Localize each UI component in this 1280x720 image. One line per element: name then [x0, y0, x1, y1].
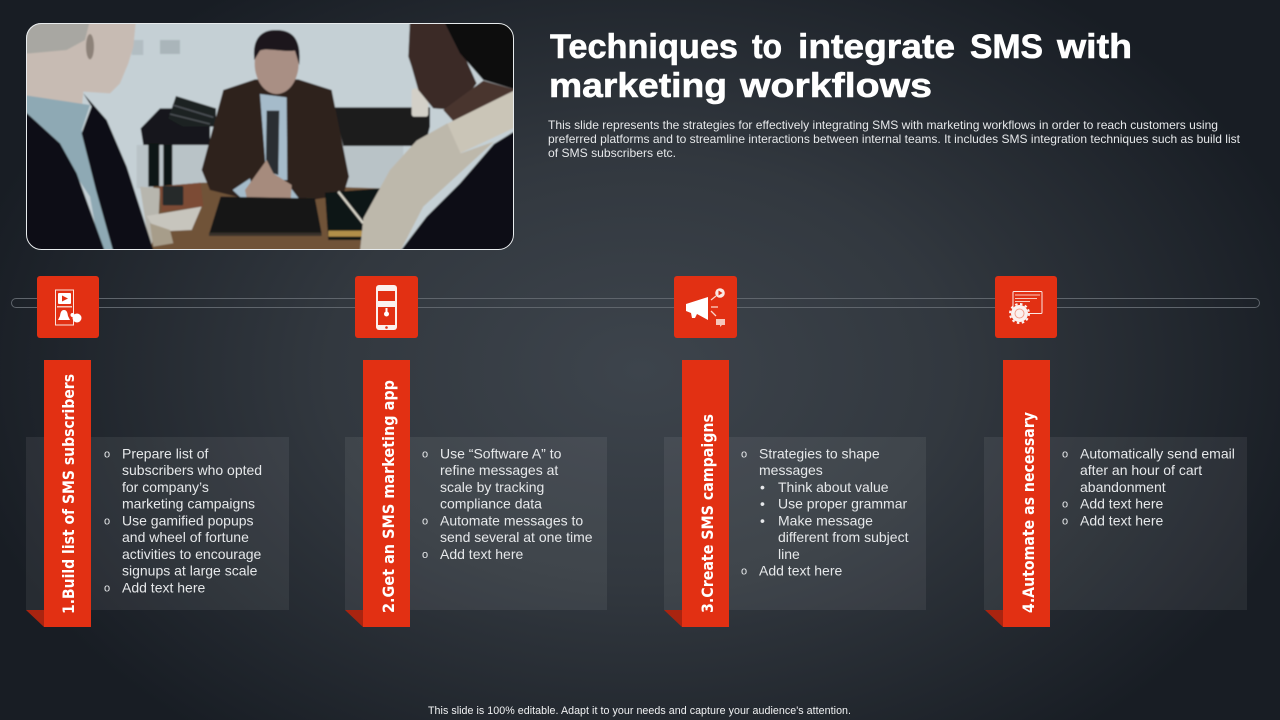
- title: Techniques: [550, 28, 738, 66]
- panel: step 4: after an hour of cart: [1080, 462, 1202, 478]
- panel: step 4: o: [1062, 448, 1068, 460]
- panel: step 3: Use proper grammar: [778, 496, 907, 512]
- panel: step 4: [984, 360, 1247, 627]
- panel: step 1: o: [104, 516, 110, 528]
- panel: step 2: compliance data: [440, 496, 542, 512]
- panel: step 1: subscribers who opted: [122, 462, 262, 478]
- icon: phone with video and bell: [37, 276, 99, 338]
- panel: step 2: [345, 360, 607, 627]
- icon: monitor and gear: [995, 276, 1057, 338]
- intro text block: [548, 118, 1241, 160]
- panel: step 2: o: [422, 448, 428, 460]
- panel: step 1: Add text here: [122, 580, 205, 596]
- panel: step 1: marketing campaigns: [122, 496, 255, 512]
- panel: step 1: 1.Build list of SMS subscribers: [59, 374, 78, 614]
- panel: step 1: and wheel of fortune: [122, 529, 249, 545]
- panel: step 4: 4.Automate as necessary: [1019, 411, 1038, 613]
- panel: step 2: scale by tracking: [440, 479, 544, 495]
- intro text block: of SMS subscribers etc.: [548, 146, 676, 160]
- panel: step 3: different from subject: [778, 529, 909, 545]
- panel: step 4: Add text here: [1080, 512, 1163, 528]
- footer note: This slide is 100% editable. Adapt it to your needs and capture your audience's attention.: [428, 705, 851, 717]
- panel: step 2: o: [422, 516, 428, 528]
- title: [549, 28, 1132, 105]
- icon: megaphone: [674, 276, 737, 338]
- panel: step 1: [26, 360, 289, 627]
- panel: step 4: o: [1062, 516, 1068, 528]
- panel: step 2: 2.Get an SMS marketing app: [379, 380, 398, 613]
- panel: step 3: Strategies to shape: [759, 446, 880, 462]
- panel: step 3: line: [778, 546, 800, 562]
- panel: step 3: •: [760, 496, 765, 512]
- panel: step 2: refine messages at: [440, 462, 558, 478]
- timeline track: [12, 298, 1260, 308]
- panel: step 3: o: [741, 448, 747, 460]
- panel: step 2: Automate messages to: [440, 512, 583, 528]
- panel: step 3: •: [760, 512, 765, 528]
- panel: step 1: o: [104, 582, 110, 594]
- panel: step 4: Automatically send email: [1080, 446, 1235, 462]
- icon: smartphone touch: [355, 276, 418, 338]
- panel: step 2: Use “Software A” to: [440, 446, 562, 462]
- panel: step 4: abandonment: [1080, 479, 1166, 495]
- panel: step 3: [664, 360, 926, 627]
- panel: step 1: signups at large scale: [122, 563, 258, 579]
- panel: step 2: send several at one time: [440, 529, 593, 545]
- title: SMS: [970, 28, 1043, 66]
- title: to: [752, 28, 782, 66]
- panel: step 1: Use gamified popups: [122, 512, 254, 528]
- panel: step 4: Add text here: [1080, 496, 1163, 512]
- title: workflows: [739, 67, 932, 105]
- panel: step 3: o: [741, 566, 747, 578]
- panel: step 4: o: [1062, 499, 1068, 511]
- panel: step 3: •: [760, 479, 765, 495]
- panel: step 3: Think about value: [778, 479, 889, 495]
- panel: step 2: Add text here: [440, 546, 523, 562]
- intro text block: preferred platforms and to streamline interactions between internal teams. It includes SMS integration techniques such as build list: [548, 132, 1241, 146]
- photo: three people in an office meeting: [20, 20, 520, 257]
- panel: step 3: Make message: [778, 512, 873, 528]
- panel: step 1: Prepare list of: [122, 446, 208, 462]
- title: marketing: [549, 67, 727, 105]
- panel: step 2: o: [422, 549, 428, 561]
- panel: step 3: 3.Create SMS campaigns: [698, 414, 717, 613]
- panel: step 3: messages: [759, 462, 823, 478]
- panel: step 1: for company’s: [122, 479, 209, 495]
- intro text block: This slide represents the strategies for effectively integrating SMS with marketing workflows in order to reach customers using: [548, 118, 1218, 132]
- panel: step 3: Add text here: [759, 563, 842, 579]
- panel: step 1: activities to encourage: [122, 546, 262, 562]
- panel: step 1: o: [104, 448, 110, 460]
- title: integrate: [798, 28, 955, 66]
- title: with: [1056, 28, 1132, 66]
